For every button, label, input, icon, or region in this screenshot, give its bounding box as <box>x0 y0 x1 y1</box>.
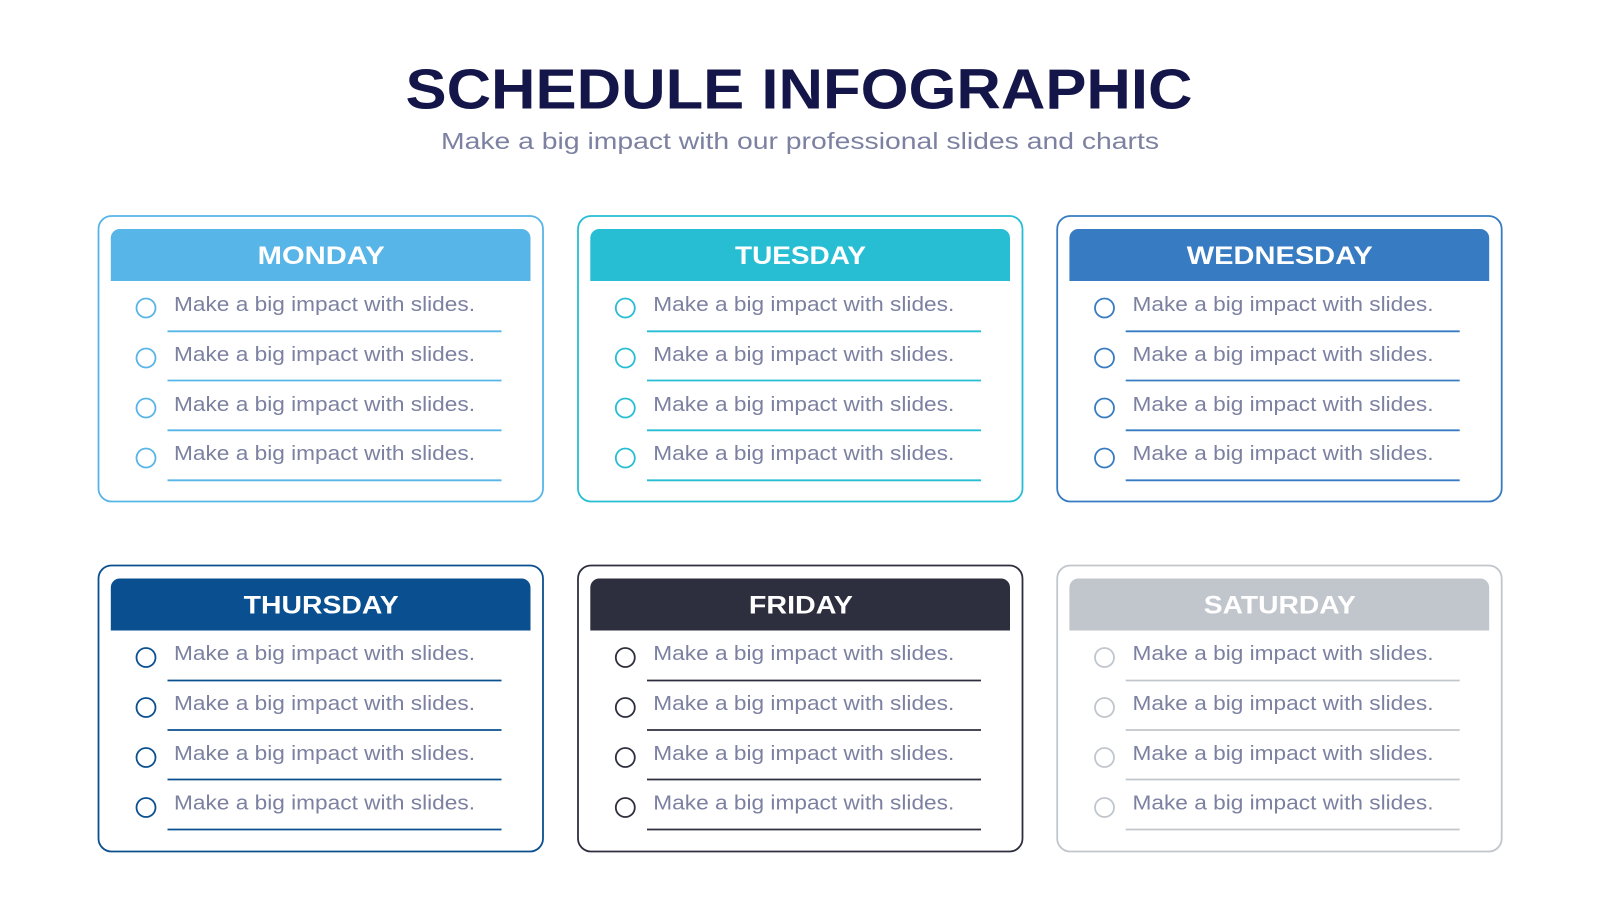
heading: Saturday: SATURDAY <box>1204 592 1356 620</box>
header: Friday <box>590 578 1010 630</box>
item 3 <box>616 394 981 430</box>
panel: Thursday <box>98 566 543 852</box>
item 1: Make a big impact with slides. <box>1132 294 1433 316</box>
item 2 <box>616 344 981 380</box>
item 2: Make a big impact with slides. <box>174 344 475 366</box>
heading: Monday: MONDAY <box>258 242 385 270</box>
item 3: Make a big impact with slides. <box>1132 743 1433 765</box>
item 4 <box>616 792 981 830</box>
item 1: Make a big impact with slides. <box>653 643 954 665</box>
heading: Wednesday: WEDNESDAY <box>1187 242 1373 270</box>
item 2: Make a big impact with slides. <box>1132 693 1433 715</box>
item 3: Make a big impact with slides. <box>653 394 954 416</box>
item 1 <box>1095 643 1460 680</box>
item 2: Make a big impact with slides. <box>653 344 954 366</box>
item 4 <box>136 792 502 830</box>
panel: Tuesday <box>578 216 1022 502</box>
item 3: Make a big impact with slides. <box>174 743 475 765</box>
header: Wednesday <box>1069 229 1489 281</box>
header: Monday <box>111 229 531 281</box>
subtitle: Make a big impact with our professional slides and charts <box>441 128 1159 154</box>
item 2: Make a big impact with slides. <box>174 693 475 715</box>
header: Tuesday <box>590 229 1010 281</box>
item 3 <box>616 743 981 780</box>
item 1: Make a big impact with slides. <box>653 294 954 316</box>
header: Thursday <box>111 578 531 630</box>
item 4: Make a big impact with slides. <box>1132 792 1433 814</box>
item 2 <box>136 693 502 730</box>
panel: Wednesday <box>1057 216 1502 502</box>
item 1 <box>136 294 502 331</box>
panel: Monday <box>98 216 543 502</box>
item 1: Make a big impact with slides. <box>174 643 475 665</box>
item 4: Make a big impact with slides. <box>174 443 475 465</box>
item 4: Make a big impact with slides. <box>653 792 954 814</box>
panel: Saturday <box>1057 566 1502 852</box>
item 1 <box>616 294 981 331</box>
header: Saturday <box>1069 578 1489 630</box>
item 3: Make a big impact with slides. <box>653 743 954 765</box>
item 4: Make a big impact with slides. <box>653 443 954 465</box>
item 2: Make a big impact with slides. <box>1132 344 1433 366</box>
item 2 <box>616 693 981 730</box>
item 3: Make a big impact with slides. <box>174 394 475 416</box>
item 3 <box>1095 743 1460 780</box>
item 3 <box>1095 394 1460 430</box>
heading: Friday: FRIDAY <box>749 592 853 620</box>
heading: Tuesday: TUESDAY <box>735 242 866 270</box>
item 4: Make a big impact with slides. <box>1132 443 1433 465</box>
panel: Friday <box>578 566 1022 852</box>
item 1: Make a big impact with slides. <box>1132 643 1433 665</box>
item 1: Make a big impact with slides. <box>174 294 475 316</box>
item 4: Make a big impact with slides. <box>174 792 475 814</box>
item 2 <box>1095 693 1460 730</box>
title: SCHEDULE INFOGRAPHIC <box>406 58 1192 122</box>
item 1 <box>616 643 981 680</box>
item 3 <box>136 394 502 430</box>
item 3 <box>136 743 502 780</box>
item 3: Make a big impact with slides. <box>1132 394 1433 416</box>
item 2 <box>136 344 502 380</box>
item 4 <box>136 443 502 480</box>
item 4 <box>1095 792 1460 830</box>
item 4 <box>1095 443 1460 480</box>
item 1 <box>1095 294 1460 331</box>
item 2 <box>1095 344 1460 380</box>
item 1 <box>136 643 502 680</box>
heading: Thursday: THURSDAY <box>244 592 399 620</box>
item 2: Make a big impact with slides. <box>653 693 954 715</box>
item 4 <box>616 443 981 480</box>
